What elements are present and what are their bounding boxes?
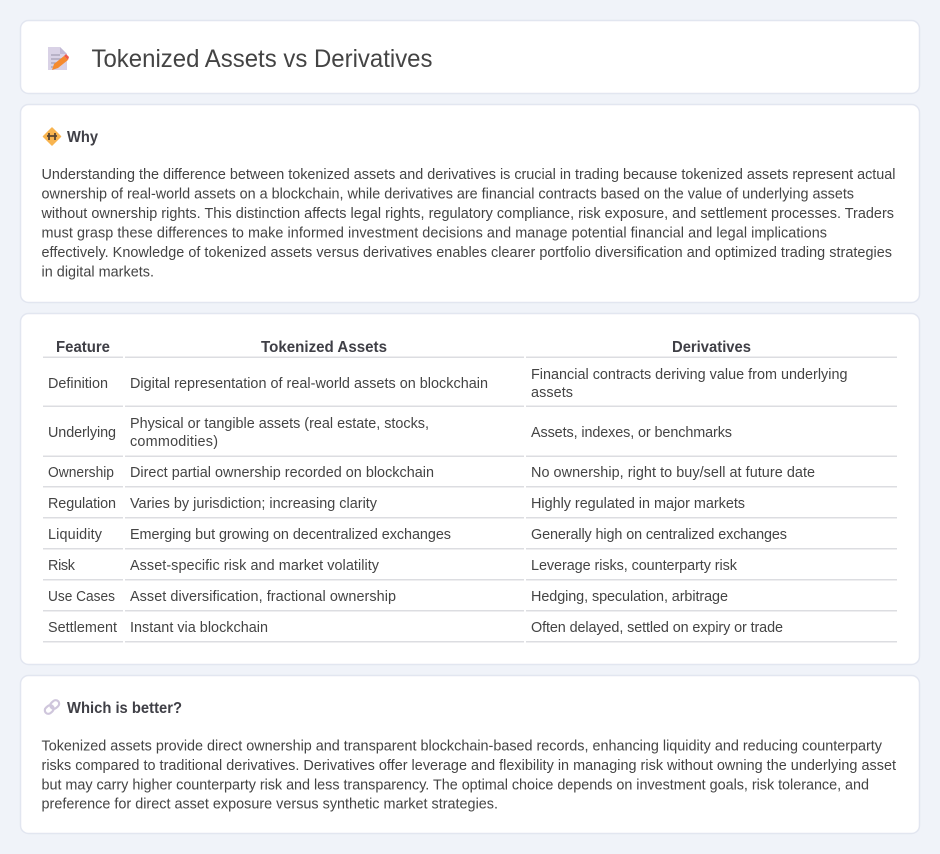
- text block: why explanation: ownership of real-world assets on a blockchain, while derivatives are financial contracts based on the value of underlying assets: [42, 186, 854, 202]
- row: settlement: [43, 620, 897, 642]
- row: use cases: Use Cases: [48, 589, 115, 605]
- row: settlement: Often delayed, settled on expiry or trade: [531, 620, 783, 636]
- row: liquidity: [43, 527, 897, 550]
- row: underlying: Assets, indexes, or benchmarks: [531, 425, 732, 441]
- row: regulation: Highly regulated in major markets: [531, 496, 745, 512]
- panel: why: [20, 104, 920, 302]
- text block: why explanation: [40, 167, 896, 280]
- text block: which is better explanation: preference for direct asset exposure versus synthetic market strategies.: [42, 796, 498, 812]
- table header: [43, 339, 897, 358]
- row: risk: Risk: [48, 558, 76, 574]
- panel: which is better: [20, 676, 920, 834]
- row: regulation: Varies by jurisdiction; increasing clarity: [130, 496, 378, 512]
- row: use cases: [43, 589, 897, 612]
- row: ownership: No ownership, right to buy/sell at future date: [531, 465, 815, 481]
- text block: which is better explanation: but may carry higher counterparty risk and less transparency. The optimal choice depends on investment goals, risk tolerance, and: [42, 778, 869, 794]
- row: underlying: Physical or tangible assets (real estate, stocks,: [130, 416, 429, 432]
- row: definition: Digital representation of real-world assets on blockchain: [130, 376, 488, 392]
- row: risk: [43, 558, 897, 580]
- row: ownership: [43, 465, 897, 488]
- panel: comparison table: [20, 314, 920, 664]
- row: definition: [43, 367, 897, 407]
- text block: which is better explanation: [42, 738, 896, 812]
- text block: why explanation: in digital markets.: [42, 264, 154, 280]
- title: Tokenized Assets vs Derivatives: [92, 45, 432, 73]
- table header: Derivatives: [672, 339, 751, 356]
- table header: Tokenized Assets: [261, 339, 387, 356]
- icon: document with pencil: [48, 47, 69, 70]
- row: regulation: [43, 496, 897, 518]
- icon: warning diamond: [44, 128, 60, 145]
- text block: which is better explanation: Tokenized assets provide direct ownership and transparent blockchain-based records, enhancing liquidity and reducing counterparty: [42, 738, 883, 754]
- panel: title header: [20, 20, 920, 94]
- heading: why: Why: [67, 129, 98, 146]
- text block: which is better explanation: risks compared to traditional derivatives. Derivatives offer leverage and flexibility in managing risk without owning the underlying asset: [42, 758, 896, 774]
- table header: Feature: [56, 339, 110, 356]
- row: liquidity: Emerging but growing on decentralized exchanges: [130, 527, 451, 543]
- row: underlying: commodities): [130, 434, 218, 450]
- row: risk: Asset-specific risk and market volatility: [130, 558, 380, 574]
- row: underlying: [43, 416, 897, 457]
- row: settlement: Settlement: [48, 620, 117, 636]
- row: use cases: Asset diversification, fractional ownership: [130, 589, 396, 605]
- text block: why explanation: effectively. Knowledge of tokenized assets versus derivatives enables clearer portfolio diversification and optimized trading strategies: [42, 245, 892, 261]
- row: ownership: Direct partial ownership recorded on blockchain: [130, 465, 434, 481]
- icon: chain link: [43, 699, 61, 715]
- row: underlying: Underlying: [48, 425, 116, 441]
- text block: why explanation: must grasp these differences to make informed investment decisions and manage potential financial and legal implications: [42, 226, 827, 242]
- heading: which is better: Which is better?: [67, 700, 182, 717]
- row: liquidity: Liquidity: [48, 527, 103, 543]
- text block: why explanation: Understanding the difference between tokenized assets and derivatives is crucial in trading because tokenized assets represent actual: [42, 167, 896, 183]
- row: settlement: Instant via blockchain: [130, 620, 268, 636]
- row: definition: Financial contracts deriving value from underlying: [531, 367, 848, 383]
- row: liquidity: Generally high on centralized exchanges: [531, 527, 787, 543]
- row: definition: Definition: [48, 376, 108, 392]
- row: regulation: Regulation: [48, 496, 116, 512]
- row: definition: assets: [531, 385, 573, 401]
- row: ownership: Ownership: [48, 465, 114, 481]
- row: use cases: Hedging, speculation, arbitrage: [531, 589, 728, 605]
- text block: why explanation: without ownership rights. This distinction affects legal rights, regulatory compliance, risk exposure, and settlement processes. Traders: [40, 206, 894, 222]
- row: risk: Leverage risks, counterparty risk: [531, 558, 738, 574]
